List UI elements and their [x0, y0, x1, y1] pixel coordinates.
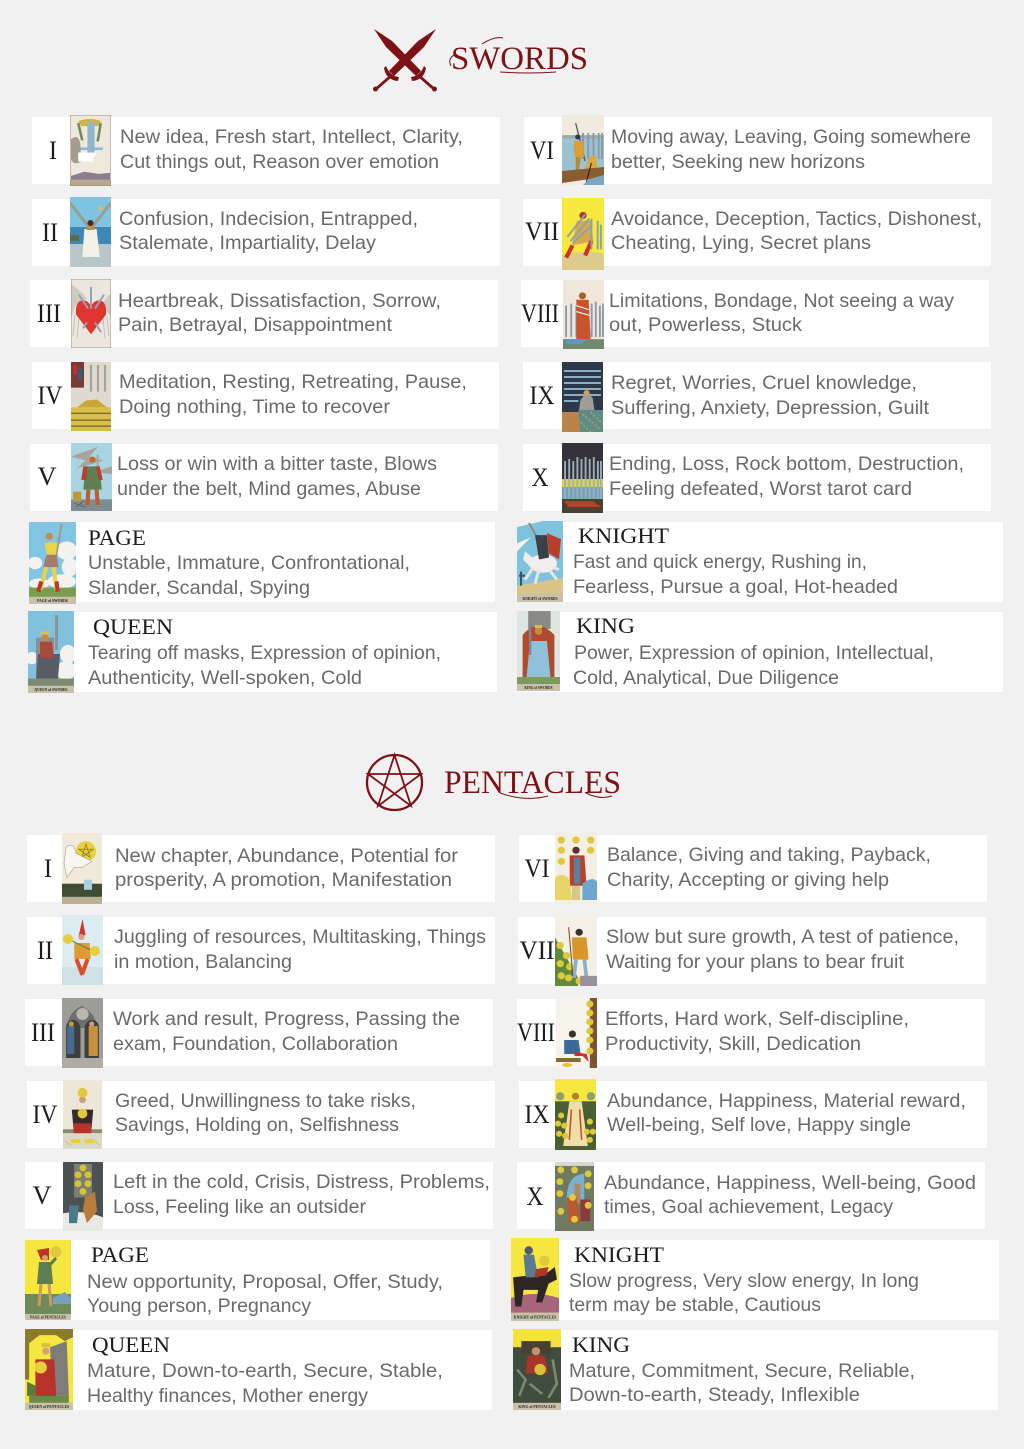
card: page of pentacles [25, 1240, 71, 1320]
card: seven of swords [562, 198, 604, 270]
panel: queen of pentacles: QUEEN [92, 1332, 170, 1357]
card: knight of swords [517, 521, 563, 602]
panel: eight of swords [521, 280, 989, 349]
panel: nine of swords: Suffering, Anxiety, Depression, Guilt [611, 397, 930, 419]
panel: knight of swords: Fearless, Pursue a goal, Hot-headed [573, 576, 898, 598]
panel: knight of swords: KNIGHT [578, 523, 669, 548]
panel: four of pentacles: Greed, Unwillingness to take risks, [115, 1090, 416, 1112]
panel: ten of swords: Ending, Loss, Rock bottom, Destruction, [609, 453, 964, 475]
panel: page of pentacles: Young person, Pregnancy [87, 1295, 311, 1317]
card: six of pentacles [555, 833, 597, 904]
panel: knight of swords: Fast and quick energy, Rushing in, [573, 551, 867, 573]
panel: ace of swords [32, 115, 500, 186]
panel: ace of swords: I [49, 135, 57, 165]
panel: six of swords [524, 115, 992, 185]
panel: queen of swords [26, 611, 497, 693]
panel: three of pentacles [25, 998, 493, 1068]
panel: page of swords: Slander, Scandal, Spying [88, 577, 310, 599]
panel: ace of pentacles: prosperity, A promotion, Manifestation [115, 869, 452, 891]
panel: ten of swords: Feeling defeated, Worst tarot card [609, 478, 912, 500]
panel: five of pentacles: V [32, 1180, 52, 1210]
card: knight of pentacles [511, 1238, 559, 1321]
panel: seven of swords [523, 198, 991, 270]
panel: six of swords: better, Seeking new horizons [611, 151, 865, 173]
card: four of swords [71, 362, 111, 431]
card: queen of pentacles: QUEEN of PENTACLES [29, 1405, 69, 1409]
panel: four of swords: IV [38, 380, 62, 410]
card: ten of swords [562, 443, 603, 513]
panel: king of pentacles: KING [572, 1332, 630, 1357]
panel: knight of pentacles: KNIGHT [574, 1242, 664, 1267]
panel: two of swords: II [42, 217, 58, 247]
panel: two of swords: Stalemate, Impartiality, Delay [119, 232, 376, 254]
card: four of pentacles [63, 1080, 102, 1149]
card: king of swords: KING of SWORDS [525, 686, 553, 690]
panel: queen of pentacles: Healthy finances, Mother energy [87, 1385, 368, 1407]
heading: pentacles: PENTACLES [444, 765, 621, 801]
card: knight of pentacles: KNIGHT of PENTACLES [514, 1315, 556, 1319]
icon: pentagram [367, 755, 422, 810]
panel: ten of pentacles: Abundance, Happiness, Well-being, Good [604, 1172, 976, 1194]
card: queen of swords [28, 611, 74, 693]
panel: seven of pentacles: Slow but sure growth, A test of patience, [606, 926, 959, 948]
card: nine of swords [562, 362, 603, 432]
panel: ace of pentacles: I [44, 853, 52, 883]
panel: knight of swords [517, 521, 1003, 602]
panel: four of pentacles [27, 1080, 495, 1149]
panel: three of pentacles: exam, Foundation, Collaboration [113, 1033, 398, 1055]
panel: queen of swords: Tearing off masks, Expression of opinion, [88, 642, 441, 664]
panel: nine of swords: IX [530, 380, 554, 410]
panel: eight of pentacles: Productivity, Skill, Dedication [605, 1033, 861, 1055]
panel: eight of swords: out, Powerless, Stuck [609, 314, 802, 336]
panel: three of swords: III [37, 298, 61, 328]
panel: seven of pentacles [518, 915, 986, 986]
card: queen of swords: QUEEN of SWORDS [34, 688, 68, 692]
card: king of pentacles: KING of PENTACLES [518, 1405, 556, 1409]
panel: six of pentacles [519, 833, 987, 904]
panel: nine of pentacles [519, 1079, 987, 1150]
heading: swords: SWORDS [451, 41, 588, 77]
panel: ten of pentacles: X [526, 1181, 544, 1211]
panel: five of pentacles: Left in the cold, Crisis, Distress, Problems, [113, 1171, 490, 1193]
panel: eight of pentacles [517, 998, 985, 1068]
panel: five of swords [30, 443, 498, 511]
card: eight of swords [563, 280, 604, 349]
panel: four of pentacles: Savings, Holding on, Selfishness [115, 1114, 399, 1136]
panel: eight of swords: Limitations, Bondage, Not seeing a way [609, 290, 954, 312]
card: ace of swords [70, 115, 111, 186]
panel: nine of swords [523, 362, 991, 432]
panel: ten of swords: X [532, 462, 548, 492]
panel: page of pentacles: PAGE [91, 1242, 149, 1267]
card: nine of pentacles [555, 1079, 596, 1150]
panel: four of swords [32, 362, 499, 431]
panel: three of swords: Heartbreak, Dissatisfaction, Sorrow, [118, 290, 441, 312]
panel: six of pentacles: Balance, Giving and taking, Payback, [607, 844, 931, 866]
card: eight of pentacles [556, 998, 597, 1068]
panel: nine of pentacles: Well-being, Self love, Happy single [607, 1114, 911, 1136]
panel: five of swords: under the belt, Mind games, Abuse [117, 478, 421, 500]
panel: two of pentacles: Juggling of resources, Multitasking, Things [114, 926, 486, 948]
panel: king of pentacles: Down-to-earth, Steady, Inflexible [569, 1384, 860, 1406]
panel: two of pentacles: in motion, Balancing [114, 951, 292, 973]
panel: five of swords: Loss or win with a bitter taste, Blows [117, 453, 437, 475]
panel: ten of pentacles [517, 1162, 985, 1231]
panel: knight of pentacles: Slow progress, Very slow energy, In long [569, 1270, 919, 1292]
card: two of pentacles [62, 915, 103, 985]
panel: page of pentacles [25, 1240, 490, 1320]
panel: seven of pentacles: Waiting for your plans to bear fruit [606, 951, 905, 973]
card: three of swords [71, 279, 111, 348]
panel: seven of pentacles: VII [520, 935, 554, 965]
panel: king of swords: Cold, Analytical, Due Diligence [573, 667, 839, 689]
icon: crossed swords [373, 29, 437, 92]
card: queen of pentacles [25, 1329, 73, 1410]
card: two of swords [70, 197, 111, 267]
panel: six of pentacles: Charity, Accepting or giving help [607, 869, 889, 891]
card: ten of pentacles [555, 1162, 594, 1231]
panel: two of swords [32, 197, 500, 267]
panel: nine of pentacles: Abundance, Happiness, Material reward, [607, 1090, 966, 1112]
panel: three of pentacles: Work and result, Progress, Passing the [113, 1008, 460, 1030]
panel: five of pentacles [25, 1162, 493, 1231]
panel: queen of swords: Authenticity, Well-spoken, Cold [88, 667, 362, 689]
panel: ace of swords: Cut things out, Reason over emotion [120, 151, 439, 173]
card: six of swords [562, 115, 604, 185]
panel: four of swords: Doing nothing, Time to recover [119, 396, 391, 418]
card: ace of pentacles [62, 833, 102, 904]
panel: seven of swords: Cheating, Lying, Secret plans [611, 232, 871, 254]
panel: page of pentacles: New opportunity, Proposal, Offer, Study, [87, 1271, 443, 1293]
panel: page of swords: Unstable, Immature, Confrontational, [88, 552, 410, 574]
card: seven of pentacles [555, 915, 597, 986]
panel: king of pentacles [513, 1329, 998, 1410]
panel: queen of pentacles: Mature, Down-to-earth, Secure, Stable, [87, 1360, 443, 1382]
panel: five of swords: V [38, 461, 56, 491]
panel: three of pentacles: III [31, 1017, 55, 1047]
panel: king of swords: KING [576, 613, 635, 638]
panel: four of swords: Meditation, Resting, Retreating, Pause, [119, 371, 467, 393]
panel: king of pentacles: Mature, Commitment, Secure, Reliable, [569, 1360, 915, 1382]
panel: five of pentacles: Loss, Feeling like an outsider [113, 1196, 367, 1218]
panel: nine of pentacles: IX [524, 1099, 550, 1129]
panel: page of swords: PAGE [88, 525, 146, 550]
panel: king of swords: Power, Expression of opinion, Intellectual, [574, 642, 934, 664]
panel: two of swords: Confusion, Indecision, Entrapped, [119, 208, 418, 230]
panel: eight of pentacles: Efforts, Hard work, Self-discipline, [605, 1008, 909, 1030]
panel: two of pentacles: II [37, 935, 53, 965]
card: page of pentacles: PAGE of PENTACLES [30, 1316, 66, 1320]
panel: queen of pentacles [25, 1329, 492, 1410]
panel: three of swords: Pain, Betrayal, Disappointment [118, 314, 393, 336]
panel: seven of swords: Avoidance, Deception, Tactics, Dishonest, [611, 208, 982, 230]
panel: eight of pentacles: VIII [517, 1017, 555, 1047]
panel: two of pentacles [27, 915, 495, 985]
panel: page of swords [28, 522, 495, 604]
card: five of swords [71, 443, 112, 511]
card: king of swords [517, 611, 560, 691]
panel: knight of pentacles: term may be stable, Cautious [569, 1294, 821, 1316]
panel: ten of pentacles: times, Goal achievement, Legacy [604, 1196, 893, 1218]
panel: six of swords: VI [530, 135, 554, 165]
panel: six of pentacles: VI [524, 853, 550, 883]
panel: knight of pentacles [511, 1238, 999, 1321]
panel: ten of swords [523, 443, 991, 513]
card: king of pentacles [513, 1329, 561, 1410]
card: page of swords [29, 522, 76, 604]
panel: ace of pentacles [27, 833, 495, 904]
panel: three of swords [30, 279, 498, 348]
panel: ace of pentacles: New chapter, Abundance, Potential for [115, 845, 459, 867]
panel: king of swords [517, 611, 1003, 692]
panel: nine of swords: Regret, Worries, Cruel knowledge, [611, 372, 917, 394]
panel: six of swords: Moving away, Leaving, Going somewhere [611, 126, 971, 148]
panel: eight of swords: VIII [521, 298, 559, 328]
card: five of pentacles [63, 1162, 103, 1231]
panel: seven of swords: VII [525, 216, 559, 246]
panel: queen of swords: QUEEN [93, 614, 173, 639]
panel: ace of swords: New idea, Fresh start, Intellect, Clarity, [120, 126, 463, 148]
card: page of swords: PAGE of SWORDS [37, 599, 68, 603]
card: three of pentacles [62, 998, 103, 1068]
panel: four of pentacles: IV [32, 1099, 58, 1129]
card: knight of swords: KNIGHT of SWORDS [522, 597, 558, 601]
